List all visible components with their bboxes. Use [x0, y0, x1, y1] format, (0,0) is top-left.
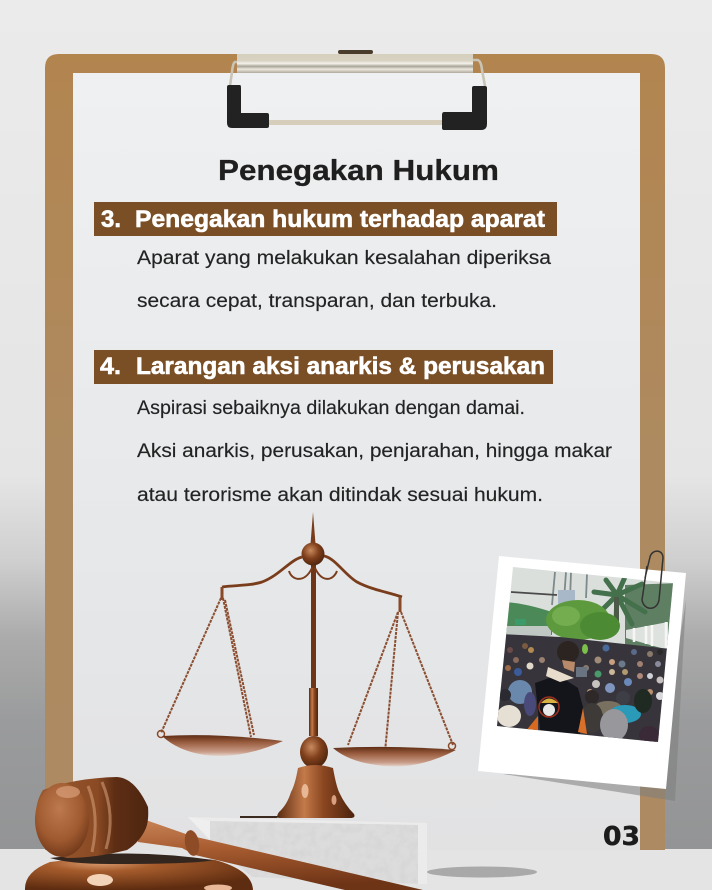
section 4 heading: 4. — [100, 353, 121, 380]
clipboard board — [45, 54, 665, 850]
paper sheet — [73, 73, 640, 850]
icon: paperclip — [642, 551, 663, 608]
section 3 body text — [137, 248, 551, 312]
floor — [0, 849, 712, 890]
section 4 body text: atau terorisme akan ditindak sesuai hukum. — [137, 485, 543, 506]
photo shadow — [503, 600, 686, 801]
section 4 body text: Aksi anarkis, perusakan, penjarahan, hingga makar — [137, 441, 613, 462]
section 4 body text: Aspirasi sebaiknya dilakukan dengan damai. — [137, 398, 525, 419]
section 4 heading: Larangan aksi anarkis & perusakan — [136, 353, 545, 380]
title: Penegakan Hukum — [218, 155, 499, 187]
section 3 heading: Penegakan hukum terhadap aparat — [135, 206, 545, 233]
section 4 body text — [137, 398, 613, 506]
page number: 03 — [603, 822, 640, 852]
section 3 heading: 3. — [101, 206, 121, 233]
section 3 heading — [94, 202, 557, 236]
section 3 body text: Aparat yang melakukan kesalahan diperiksa — [137, 248, 551, 269]
icon: gavel — [25, 777, 423, 890]
icon: balance scale — [158, 512, 456, 818]
section 3 body text: secara cepat, transparan, dan terbuka. — [137, 291, 497, 312]
polaroid photo — [478, 556, 686, 789]
stone pedestal — [188, 817, 427, 884]
metal clip — [227, 50, 487, 130]
